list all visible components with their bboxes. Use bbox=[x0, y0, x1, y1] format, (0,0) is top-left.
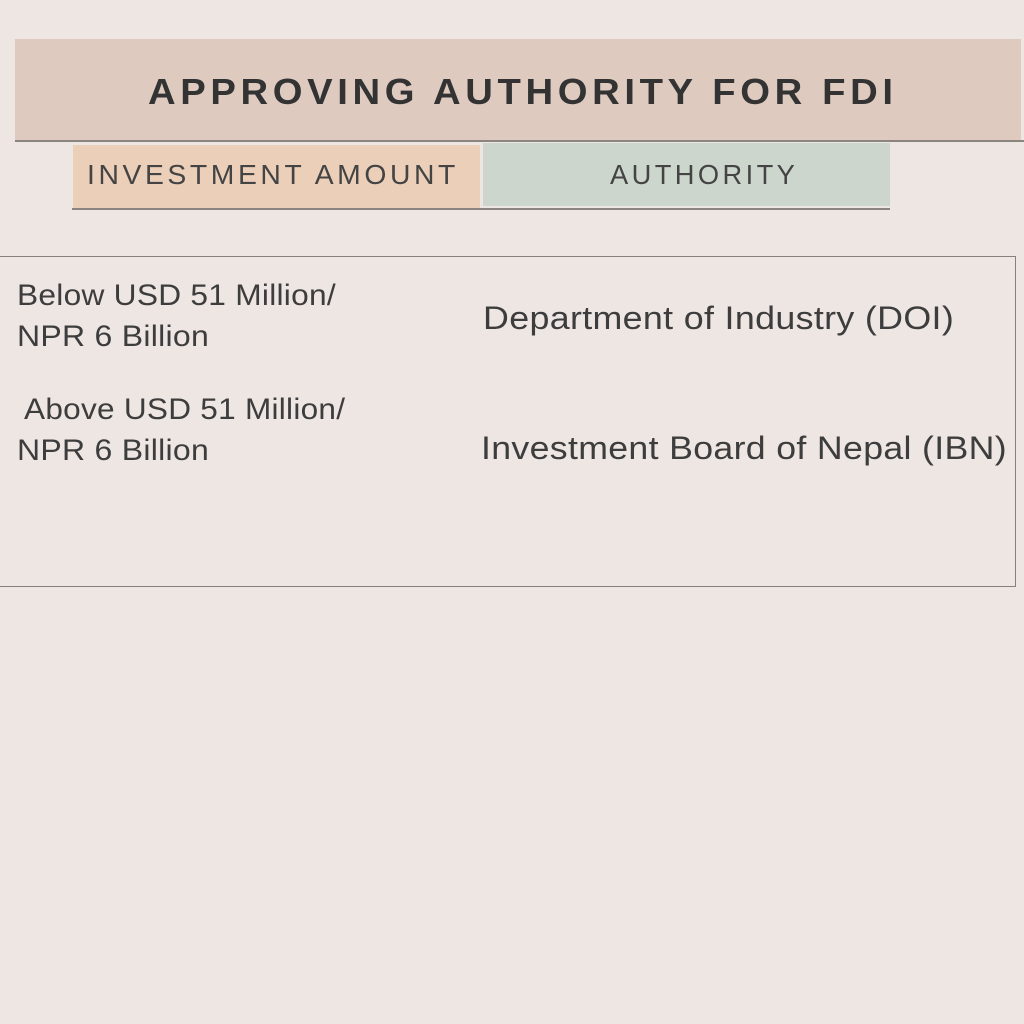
header: authority: AUTHORITY bbox=[610, 159, 798, 190]
row 1 amount: Below USD 51 Million/ bbox=[17, 279, 336, 312]
table panel bbox=[0, 256, 1016, 587]
row 1 amount bbox=[17, 279, 336, 353]
row 2 amount: Above USD 51 Million/ bbox=[24, 393, 345, 426]
row 2 amount bbox=[17, 393, 345, 467]
row 2 amount: NPR 6 Billion bbox=[17, 434, 209, 467]
row 1 authority: Department of Industry (DOI) bbox=[483, 300, 954, 336]
title banner bbox=[15, 39, 1024, 142]
title: APPROVING AUTHORITY FOR FDI bbox=[148, 71, 898, 112]
row 1 amount: NPR 6 Billion bbox=[17, 320, 209, 353]
header: authority bbox=[483, 143, 890, 206]
row 2 authority: Investment Board of Nepal (IBN) bbox=[481, 430, 1007, 466]
header: investment amount: INVESTMENT AMOUNT bbox=[87, 159, 459, 190]
header: investment amount bbox=[73, 145, 480, 208]
header row bbox=[72, 143, 890, 210]
